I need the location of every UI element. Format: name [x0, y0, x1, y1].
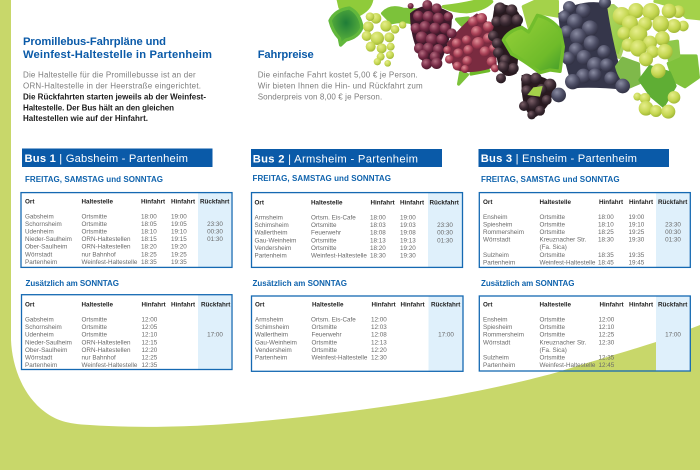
bus 2 weekend heading: FREITAG, SAMSTAG und SONNTAG	[252, 174, 391, 183]
bus 1 title bar	[22, 148, 212, 167]
bus 1 sunday timetable: 12:25	[142, 354, 158, 362]
bus 3 weekend timetable: 19:25	[628, 229, 645, 236]
bus 3 weekend timetable: 19:35	[628, 252, 645, 259]
bus 2 sunday timetable: 12:03	[371, 324, 387, 331]
bus 1 sunday timetable: Gabsheim	[25, 317, 54, 324]
bus 2 weekend timetable: 18:00	[370, 215, 386, 222]
bus 3 sunday timetable: Hinfahrt	[629, 301, 654, 308]
bus 3 weekend timetable: 23:30	[665, 222, 681, 229]
bus 1 weekend heading: FREITAG, SAMSTAG und SONNTAG	[25, 175, 163, 184]
bus 1 weekend timetable: Ort	[25, 198, 35, 205]
bus 3 weekend timetable: 18:00	[598, 214, 614, 221]
bus 2 sunday timetable: Ortsm. Eis-Cafe	[311, 317, 356, 324]
bus 3 weekend timetable: Rückfahrt	[658, 199, 688, 206]
bus 1 weekend timetable: Hinfahrt	[141, 198, 166, 205]
intro text block: Die Haltestelle für die Promillebusse ist an der	[23, 70, 196, 80]
bus 2 weekend timetable: 18:03	[370, 222, 386, 229]
bus 1 sunday timetable: 12:05	[142, 324, 158, 331]
bus 2 sunday timetable: Gau-Weinheim	[255, 339, 297, 346]
bus 3 title bar: Bus 3 | Ensheim - Partenheim	[481, 153, 637, 165]
bus 1 sunday timetable	[22, 295, 232, 370]
bus 1 sunday timetable: Hinfahrt	[142, 301, 167, 308]
bus 2 weekend timetable: 19:13	[400, 237, 416, 244]
intro text block: Die Rückfahrten starten jeweils ab der Weinfest-	[23, 92, 206, 101]
bus 2 weekend timetable: Ortsmitte	[311, 245, 337, 252]
bus 1 sunday timetable: Ober-Saulheim	[25, 347, 67, 354]
bus 3 sunday timetable: Spiesheim	[483, 324, 512, 331]
fares text block: Sonderpreis von 8,00 € je Person.	[258, 92, 382, 101]
fares text block: Wir bieten Ihnen die Hin- und Rückfahrt zum	[258, 82, 423, 90]
bus 1 title bar: Bus 1 | Gabsheim - Partenheim	[24, 153, 188, 165]
bus 3 sunday timetable: 12:10	[598, 324, 615, 331]
bus 2 weekend timetable: Ortsm. Eis-Cafe	[311, 215, 356, 222]
bus 3 weekend timetable: 19:00	[628, 214, 645, 221]
bus 3 sunday timetable: 17:00	[665, 332, 681, 339]
bus 2 weekend timetable	[252, 193, 462, 267]
bus 3 weekend timetable: 18:35	[598, 252, 614, 259]
bus 3 weekend timetable: Weinfest-Haltestelle	[540, 259, 596, 266]
bus 3 weekend timetable: Ort	[483, 199, 493, 206]
bus 3 weekend timetable	[479, 193, 690, 267]
bus 3 weekend timetable: Kreuznacher Str.	[540, 237, 587, 244]
bus 3 weekend timetable: 18:45	[598, 259, 614, 266]
bus 1 weekend timetable: 19:15	[171, 236, 187, 243]
bus 3 sunday timetable: Partenheim	[483, 362, 515, 369]
panel: bus 2	[251, 149, 463, 371]
bus 1 sunday timetable: ORN-Haltestellen	[82, 347, 131, 354]
heading: bus schedules: Weinfest-Haltestelle in Partenheim	[23, 49, 212, 61]
bus 3 weekend timetable: Wörrstadt	[483, 237, 511, 244]
bus 3 sunday timetable: Haltestelle	[540, 301, 571, 308]
fares text block: Die einfache Fahrt kostet 5,00 € je Person.	[258, 70, 418, 80]
bus 1 sunday timetable: ORN-Haltestellen	[82, 339, 131, 346]
bus 3 weekend timetable: Partenheim	[483, 259, 515, 266]
bus 1 sunday timetable: 12:35	[142, 362, 158, 369]
heading: bus schedules	[23, 36, 212, 61]
bus 3 weekend timetable: Ensheim	[483, 214, 508, 221]
bus 2 sunday timetable: Wallertheim	[255, 332, 288, 339]
panel: bus 3	[478, 149, 690, 371]
bus 2 sunday timetable: Schimsheim	[255, 324, 289, 331]
bus 1 sunday timetable: Partenheim	[25, 362, 57, 369]
backing shadows	[410, 6, 452, 66]
bus 1 weekend timetable: Wörrstadt	[25, 251, 53, 258]
bus 3 sunday timetable: 12:35	[598, 354, 615, 362]
bus 3 weekend timetable: Hinfahrt	[599, 199, 624, 206]
bus 3 sunday timetable: 12:25	[598, 332, 615, 339]
bus 2 weekend timetable: Wallertheim	[254, 230, 288, 237]
bus 1 sunday timetable: 12:15	[142, 339, 158, 346]
bus 1 sunday timetable: 17:00	[207, 332, 223, 339]
bus 2 sunday timetable: Haltestelle	[312, 301, 344, 308]
bus 3 title bar	[478, 149, 669, 167]
bus 3 sunday timetable: Ortsmitte	[540, 332, 566, 339]
bus 3 sunday timetable: Wörrstadt	[483, 339, 511, 346]
bus 2 sunday timetable: Partenheim	[255, 354, 287, 362]
bus 2 sunday timetable: 12:30	[371, 354, 387, 362]
bus 1 weekend timetable: 18:35	[141, 259, 157, 266]
bus 3 weekend timetable: 01:30	[665, 237, 681, 244]
bus 1 weekend timetable: Schornsheim	[25, 221, 62, 228]
bus 1 weekend timetable: Gabsheim	[25, 213, 54, 220]
bus 1 sunday timetable: Ortsmitte	[82, 317, 108, 324]
bus 1 sunday timetable: nur Bahnhof	[82, 354, 116, 362]
bus 1 weekend timetable: Ortsmitte	[82, 213, 108, 220]
bus 1 sunday heading: Zusätzlich am SONNTAG	[26, 279, 119, 288]
bus 3 sunday timetable: Kreuznacher Str.	[540, 339, 587, 346]
bus 2 weekend timetable: Weinfest-Haltestelle	[311, 252, 367, 259]
bus 3 sunday timetable: Rommersheim	[483, 332, 524, 339]
bus 1 weekend timetable: Ober-Saulheim	[25, 244, 67, 251]
heading: bus schedules: Promillebus-Fahrpläne und	[23, 36, 166, 48]
bus 2 weekend timetable: 18:13	[370, 237, 386, 244]
bus 1 weekend timetable: 19:20	[171, 244, 187, 251]
panel: bus 1	[21, 148, 232, 370]
bus 1 weekend timetable: 18:00	[141, 213, 157, 220]
bus 2 sunday timetable: 12:00	[371, 317, 387, 324]
fares text block	[258, 70, 423, 101]
bus 3 weekend timetable: (Fa. Sica)	[540, 244, 567, 251]
bus 2 weekend timetable: Feuerwehr	[311, 230, 341, 237]
bus 2 weekend timetable: 19:08	[400, 230, 416, 237]
bus 2 sunday timetable: Hinfahrt	[372, 301, 397, 308]
bus 1 weekend timetable: 19:10	[171, 228, 187, 236]
bus 1 sunday timetable: Ortsmitte	[82, 324, 108, 331]
bus 2 sunday timetable: Vendersheim	[255, 347, 292, 354]
bus 1 weekend timetable: 23:30	[207, 221, 223, 228]
bus 2 weekend timetable: Rückfahrt	[430, 199, 460, 206]
bus 1 weekend timetable: 18:10	[141, 228, 157, 236]
bus 2 weekend timetable: 18:20	[370, 245, 386, 252]
bus 3 sunday timetable: Weinfest-Haltestelle	[540, 362, 596, 369]
bus 2 weekend timetable: 18:08	[370, 230, 386, 237]
bus 2 sunday timetable: 12:13	[371, 339, 387, 346]
bus 1 weekend timetable: 00:30	[207, 228, 223, 236]
bus 2 sunday timetable: Ortsmitte	[312, 339, 338, 346]
bus 3 weekend timetable: Ortsmitte	[540, 222, 566, 229]
bus 3 weekend timetable: 18:30	[598, 237, 614, 244]
bus 3 sunday timetable: 12:45	[598, 362, 615, 369]
bus 2 sunday timetable: Rückfahrt	[431, 301, 461, 308]
bus 1 weekend timetable: Nieder-Saulheim	[25, 236, 72, 243]
bus 2 weekend timetable: 18:30	[370, 252, 386, 259]
bus 1 weekend timetable: 18:20	[141, 244, 157, 251]
bus 2 sunday timetable: 17:00	[438, 332, 454, 339]
bus 2 sunday timetable: 12:20	[371, 347, 387, 354]
bus 2 sunday timetable: Armsheim	[255, 317, 283, 324]
bus 1 weekend timetable: Hinfahrt	[171, 198, 196, 205]
bus 3 weekend timetable: 00:30	[665, 229, 681, 236]
bus 1 sunday timetable: 12:20	[142, 347, 158, 354]
bus 1 weekend timetable: Partenheim	[25, 259, 57, 266]
bus 3 sunday timetable: 12:30	[598, 339, 615, 346]
bus 1 sunday timetable: Haltestelle	[82, 301, 113, 308]
bus 1 weekend timetable: 19:00	[171, 213, 187, 220]
bus 3 sunday timetable: Ort	[483, 301, 493, 308]
bus 1 sunday timetable: Ort	[25, 301, 35, 308]
bus 3 sunday timetable: Ensheim	[483, 317, 508, 324]
bus 1 sunday timetable: 12:10	[142, 332, 158, 339]
bus 1 weekend timetable: 18:25	[141, 251, 157, 258]
bus 3 weekend timetable: 19:30	[628, 237, 645, 244]
bus 1 weekend timetable: 18:15	[141, 236, 157, 243]
bus 3 weekend timetable: Hinfahrt	[629, 199, 654, 206]
bus 2 weekend timetable: Vendersheim	[254, 245, 291, 252]
bus 3 weekend timetable: 18:10	[598, 222, 614, 229]
intro text block: Haltestellen wie auf der Hinfahrt.	[23, 114, 148, 123]
bus 2 title bar	[251, 149, 442, 167]
bus 1 weekend timetable: Weinfest-Haltestelle	[82, 259, 138, 266]
bus 1 sunday timetable: 12:00	[142, 317, 158, 324]
bus 2 sunday timetable: Weinfest-Haltestelle	[312, 354, 368, 362]
bus 1 weekend timetable: Udenheim	[25, 228, 54, 236]
bus 2 weekend timetable: Gau-Weinheim	[254, 237, 296, 244]
bus 1 sunday timetable: Rückfahrt	[201, 301, 231, 308]
bus 3 weekend heading: FREITAG, SAMSTAG und SONNTAG	[481, 175, 620, 184]
bus 1 weekend timetable: 01:30	[207, 236, 223, 243]
bus 1 weekend timetable: 19:05	[171, 221, 187, 228]
bus 2 sunday timetable: Ortsmitte	[312, 347, 338, 354]
bus 1 weekend timetable: Ortsmitte	[82, 228, 108, 236]
bus 3 weekend timetable: Sulzheim	[483, 252, 509, 259]
bus 2 weekend timetable: 19:00	[400, 215, 416, 222]
bus 3 sunday timetable: Rückfahrt	[658, 301, 688, 308]
bus 2 weekend timetable: Haltestelle	[311, 199, 343, 206]
bus 2 weekend timetable: Armsheim	[254, 215, 283, 222]
bus 2 sunday timetable: 12:08	[371, 332, 387, 339]
bus 1 sunday timetable: Hinfahrt	[171, 301, 196, 308]
bus 2 weekend timetable: Ortsmitte	[311, 237, 337, 244]
bus 1 weekend timetable: 19:35	[171, 259, 187, 266]
bus 2 weekend timetable: Partenheim	[254, 252, 287, 259]
bus 2 sunday timetable: Ort	[255, 301, 265, 308]
bus 2 weekend timetable: Ortsmitte	[311, 222, 337, 229]
illustration: grapes and vine leaves	[330, 0, 700, 119]
bus 2 weekend timetable: Hinfahrt	[400, 199, 425, 206]
intro text block	[23, 70, 206, 123]
bus 3 sunday timetable	[479, 296, 690, 371]
bus 3 weekend timetable: Rommersheim	[483, 229, 524, 236]
bus 2 weekend timetable: 23:30	[437, 222, 453, 229]
bus 2 sunday timetable: Ortsmitte	[312, 324, 338, 331]
bus 3 weekend timetable: Haltestelle	[540, 199, 571, 206]
bus 3 weekend timetable: 19:10	[628, 222, 645, 229]
bus 3 weekend timetable: Ortsmitte	[540, 229, 566, 236]
bus 2 weekend timetable: 19:03	[400, 222, 416, 229]
bus 3 weekend timetable: 18:25	[598, 229, 614, 236]
bus 2 weekend timetable: Schimsheim	[254, 222, 289, 229]
bus 3 weekend timetable: 19:45	[628, 259, 645, 266]
bus 1 sunday timetable: Weinfest-Haltestelle	[82, 362, 138, 369]
bus 1 sunday timetable: Wörrstadt	[25, 354, 53, 362]
bus 3 sunday timetable: Hinfahrt	[600, 301, 625, 308]
bus 1 weekend timetable: Ortsmitte	[82, 221, 108, 228]
bus 1 weekend timetable: 19:25	[171, 251, 187, 258]
bus 1 sunday timetable: Nieder-Saulheim	[25, 339, 72, 346]
bus 2 weekend timetable: 00:30	[437, 230, 453, 237]
bus 1 weekend timetable: nur Bahnhof	[82, 251, 116, 258]
bus 2 weekend timetable: Hinfahrt	[370, 199, 396, 206]
bus 3 sunday timetable: Ortsmitte	[540, 354, 566, 362]
bus 2 title bar: Bus 2 | Armsheim - Partenheim	[253, 154, 418, 166]
intro text block: ORN-Haltestelle in der Heerstraße eingerichtet.	[23, 82, 201, 90]
bus 1 sunday timetable: Ortsmitte	[82, 332, 108, 339]
bus 2 weekend timetable: 19:20	[400, 245, 416, 252]
bus 3 sunday timetable: Ortsmitte	[540, 324, 566, 331]
bus 3 weekend timetable: Spiesheim	[483, 222, 512, 229]
bus 3 sunday timetable: Ortsmitte	[540, 317, 566, 324]
bus 1 weekend timetable: Rückfahrt	[200, 198, 230, 205]
bus 2 weekend timetable: 01:30	[437, 237, 453, 244]
bus 1 sunday timetable: Schornsheim	[25, 324, 62, 331]
bus 2 weekend timetable: Ort	[254, 199, 265, 206]
bus 2 sunday timetable	[252, 296, 463, 371]
bus 3 sunday timetable: 12:00	[598, 317, 615, 324]
bus 1 weekend timetable	[21, 193, 232, 267]
bus 2 sunday heading: Zusätzlich am SONNTAG	[252, 279, 347, 288]
bus 2 weekend timetable: 19:30	[400, 252, 416, 259]
bus 3 weekend timetable: Ortsmitte	[540, 214, 566, 221]
bus 1 weekend timetable: ORN-Haltestellen	[82, 244, 131, 251]
bus 1 weekend timetable: Haltestelle	[82, 198, 113, 205]
bus 2 sunday timetable: Hinfahrt	[400, 301, 426, 308]
bus 3 weekend timetable: Ortsmitte	[540, 252, 566, 259]
intro text block: Haltestelle. Der Bus hält an den gleichen	[23, 103, 174, 112]
bus 1 weekend timetable: ORN-Haltestellen	[82, 236, 131, 243]
heading: fares: Fahrpreise	[258, 49, 314, 61]
bus 1 sunday timetable: Udenheim	[25, 332, 54, 339]
bus 3 sunday timetable: (Fa. Sica)	[540, 347, 567, 354]
bus 3 sunday timetable: Sulzheim	[483, 354, 509, 362]
bus 1 weekend timetable: 18:05	[141, 221, 157, 228]
bus 3 sunday heading: Zusätzlich am SONNTAG	[481, 279, 574, 288]
bus 2 sunday timetable: Feuerwehr	[312, 332, 342, 339]
